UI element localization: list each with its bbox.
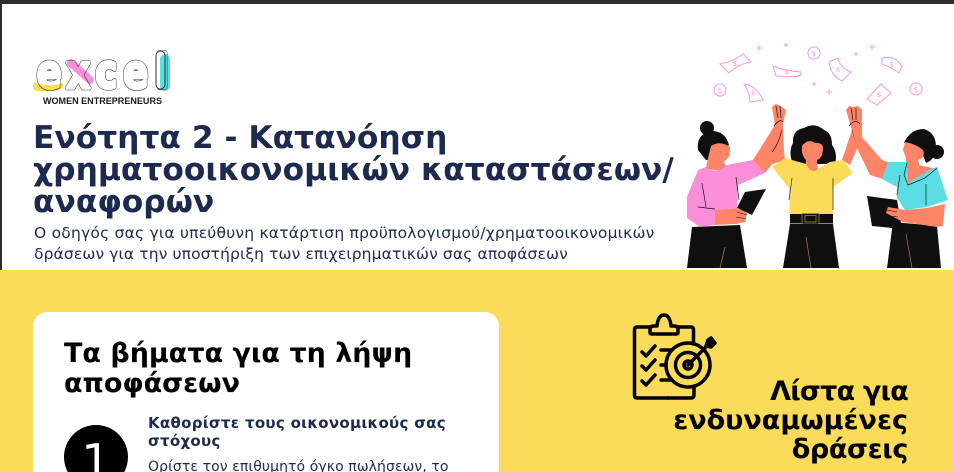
panel heading: Τα βήματα για τη λήψη bbox=[64, 338, 412, 369]
checklist heading: Λίστα για bbox=[770, 376, 908, 407]
title: Ενότητα 2 - Κατανόηση bbox=[33, 120, 447, 156]
checklist heading bbox=[673, 376, 908, 465]
woman in yellow bbox=[770, 106, 862, 268]
floating money: $ bbox=[836, 66, 840, 74]
subtitle bbox=[34, 224, 655, 263]
panel: decision steps bbox=[33, 312, 499, 472]
floating money: $ bbox=[733, 60, 737, 68]
woman in teal bbox=[852, 129, 948, 268]
illustration: three women high-fiving with money bbox=[687, 43, 948, 268]
floating money bbox=[714, 43, 922, 105]
floating money: $ bbox=[812, 50, 816, 58]
subtitle: δράσεων για την υποστήριξη των επιχειρηματικών σας αποφάσεων bbox=[34, 245, 568, 263]
title: χρηματοοικονομικών καταστάσεων/ bbox=[33, 152, 674, 188]
subtitle: Ο οδηγός σας για υπεύθυνη κατάρτιση προϋπολογισμού/χρηματοοικονομικών bbox=[34, 224, 655, 242]
floating money: $ bbox=[718, 87, 722, 95]
floating money: $ bbox=[877, 91, 881, 99]
floating money: $ bbox=[751, 89, 755, 97]
step number badge bbox=[64, 425, 128, 472]
panel heading bbox=[64, 338, 412, 399]
logo: excel bbox=[37, 45, 169, 99]
logo: WOMEN ENTREPRENEURS bbox=[43, 96, 162, 106]
floating money: $ bbox=[785, 68, 789, 76]
title bbox=[33, 120, 674, 220]
logo: excel bbox=[37, 45, 169, 99]
step title bbox=[148, 414, 446, 450]
checklist heading: δράσεις bbox=[792, 434, 908, 465]
floating money: $ bbox=[914, 86, 918, 94]
yellow section background bbox=[0, 270, 954, 472]
panel heading: αποφάσεων bbox=[64, 368, 240, 399]
window frame bbox=[0, 0, 954, 4]
title: αναφορών bbox=[33, 184, 214, 220]
left frame edge bbox=[0, 0, 2, 270]
woman in pink bbox=[687, 104, 786, 268]
icon: clipboard with target bbox=[632, 313, 717, 400]
step title: στόχους bbox=[148, 432, 221, 450]
step title: Καθορίστε τους οικονομικούς σας bbox=[148, 414, 446, 432]
floating money: $ bbox=[890, 61, 894, 69]
checklist heading: ενδυναμωμένες bbox=[673, 405, 908, 436]
